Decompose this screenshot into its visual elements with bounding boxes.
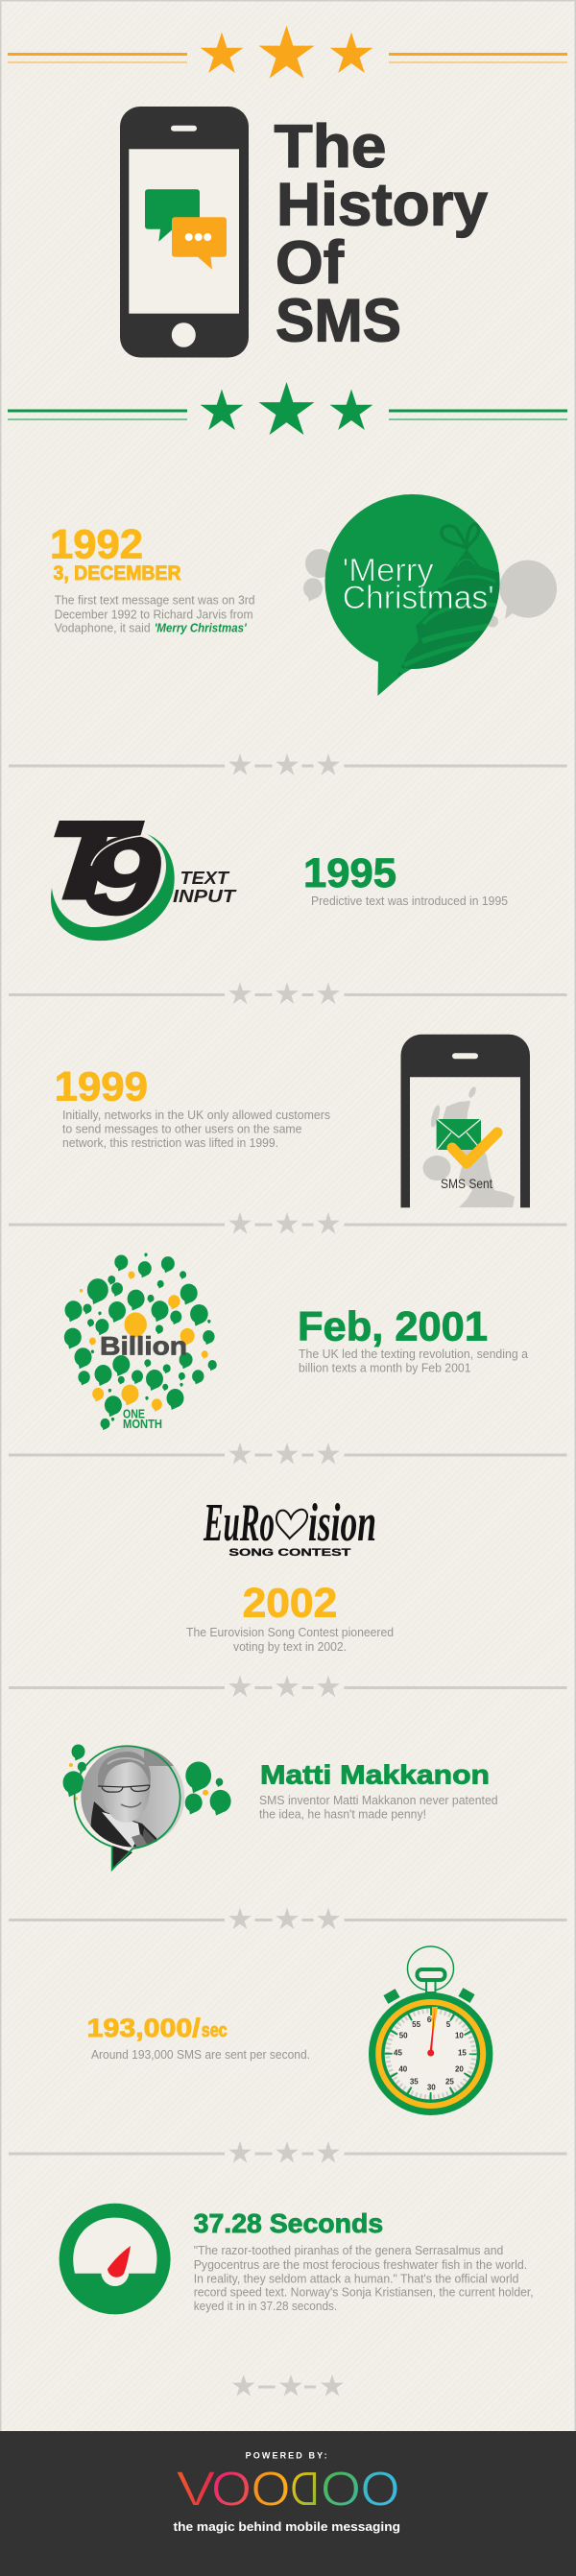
section Feb 2001: text [298, 1304, 529, 1374]
section Feb 2001: text: The UK led the texting revolution, sending a [299, 1347, 529, 1361]
shirt and tie [102, 1812, 140, 1848]
header: gold stars and lines [8, 25, 567, 79]
section 193,000 per second: text: 193,000/ [87, 2014, 201, 2042]
logo: Eurovision Song Contest [203, 1493, 376, 1559]
title: History [276, 171, 488, 238]
section 1999: text: to send messages to other users on the same [62, 1121, 301, 1136]
icon: orange chat bubble [172, 217, 227, 270]
dial numbers [394, 2015, 467, 2092]
bubble message: Christmas' [343, 580, 494, 616]
section 1999: text: 1999 [55, 1064, 148, 1110]
icon: green chat bubble [145, 189, 200, 242]
portrait: Matti Makkanon in speech bubble [63, 1742, 231, 1872]
section 1992: text [50, 522, 255, 635]
section 2002: text [186, 1580, 394, 1654]
section 37.28 seconds: text [194, 2208, 534, 2313]
title: Of [276, 229, 345, 297]
dial numbers: 5 [446, 2020, 451, 2029]
section 1995: text [303, 850, 508, 908]
closing stars [232, 2374, 344, 2397]
section 1992: text: The first text message sent was on 3rd [55, 593, 255, 607]
section 1999: text: network, this restriction was lifted in 1999. [62, 1135, 278, 1150]
logo: VOODOO: O [211, 2461, 252, 2516]
logo: T9 text input: 9 [84, 815, 160, 938]
caption: SMS Sent [441, 1176, 492, 1191]
dial numbers: 55 [412, 2020, 421, 2029]
logo: VOODOO: V [177, 2461, 215, 2516]
section 1992: text: 'Merry Christmas' [155, 621, 248, 635]
UK map [422, 1085, 515, 1207]
section 193,000 per second: text: sec [202, 2020, 228, 2041]
section 2002: text: 2002 [243, 1580, 337, 1626]
divider [9, 1676, 566, 1697]
section Matti Makkanon: text: SMS inventor Matti Makkanon never patented [259, 1793, 498, 1807]
christmas tree ornament [397, 524, 509, 676]
section Matti Makkanon: text: Matti Makkanon [260, 1759, 490, 1789]
section Matti Makkanon: text [259, 1759, 498, 1822]
section 1999: text [55, 1064, 330, 1150]
logo: T9 text input: T [48, 801, 130, 922]
title: SMS [276, 287, 401, 354]
logo: VOODOO: O [361, 2461, 399, 2516]
logo: Eurovision Song Contest: ision [308, 1493, 376, 1553]
section 2002: text: The Eurovision Song Contest pioneered [186, 1625, 394, 1639]
section 37.28 seconds: text: 37.28 Seconds [194, 2208, 383, 2238]
divider [9, 2141, 566, 2163]
tagline: the magic behind mobile messaging [173, 2519, 400, 2534]
green bubble [324, 494, 499, 669]
logo: VOODOO: D [290, 2461, 320, 2516]
section 1999: text: Initially, networks in the UK only allowed customers [62, 1108, 330, 1122]
label: Billion: Billion [100, 1332, 187, 1361]
section 37.28 seconds: text: "The razor-toothed piranhas of the genera Serrasalmus and [194, 2243, 503, 2257]
logo: T9 text input [48, 801, 237, 941]
loop and crown [407, 1946, 453, 1991]
section Feb 2001: text: Feb, 2001 [298, 1304, 488, 1350]
graphic: billion texts bubble cloud [64, 1252, 217, 1431]
title [275, 113, 488, 354]
powered by label: POWERED BY: [246, 2451, 327, 2461]
bubble message: 'Merry [343, 552, 434, 588]
green swoosh [51, 834, 175, 941]
icon: speedometer gauge [60, 2204, 171, 2314]
jacket [91, 1801, 158, 1872]
dial numbers: 50 [399, 2031, 408, 2039]
section 37.28 seconds: text: Pygocentrus are the most ferocious freshwater fish in the world. [194, 2257, 527, 2272]
footer panel [0, 2431, 576, 2576]
section Feb 2001: text: billion texts a month by Feb 2001 [299, 1361, 470, 1374]
dial numbers: 25 [445, 2077, 454, 2086]
header: green stars and lines [8, 382, 567, 435]
dial numbers: 45 [394, 2049, 402, 2058]
section 37.28 seconds: text: record speed text. Norway's Sonja Kristiansen, the current holder, [194, 2285, 534, 2300]
section Matti Makkanon: text: the idea, he hasn't made penny! [259, 1806, 426, 1822]
title: The [275, 113, 386, 180]
divider [9, 983, 566, 1004]
section 193,000 per second: text: Around 193,000 SMS are sent per second. [91, 2047, 310, 2062]
dial ticks [388, 2011, 474, 2097]
dial numbers: 30 [427, 2083, 436, 2092]
icon: stopwatch [369, 1946, 492, 2115]
side bubbles [63, 1744, 231, 1816]
section 1992: text: 1992 [50, 522, 143, 568]
section 1995: text: 1995 [303, 850, 396, 896]
section 2002: text: voting by text in 2002. [233, 1639, 347, 1654]
section 1992: text: Vodaphone, it said [55, 621, 151, 635]
logo: T9 text input: TEXT [180, 869, 230, 888]
check mark [452, 1133, 497, 1163]
ornament bow [442, 524, 478, 548]
white separator arc [91, 836, 141, 866]
divider [9, 1908, 566, 1929]
logo: T9 text input: INPUT [173, 887, 237, 906]
divider [9, 1443, 566, 1465]
body [369, 1992, 492, 2115]
head [104, 1762, 150, 1823]
icon: phone with UK map and SMS sent [400, 1035, 530, 1207]
dial numbers: 20 [455, 2064, 464, 2073]
heart [276, 1510, 307, 1538]
divider [9, 753, 566, 775]
label: One Month [123, 1406, 162, 1431]
logo: VOODOO: O [321, 2461, 361, 2516]
icon: phone with chat bubbles [120, 107, 249, 357]
photo [81, 1747, 184, 1868]
divider [9, 1212, 566, 1234]
section 37.28 seconds: text: keyed it in in 37.28 seconds. [194, 2299, 337, 2313]
dial numbers: 10 [455, 2031, 464, 2039]
speech bubble: Merry Christmas [303, 494, 557, 696]
T bar and stem [54, 821, 145, 900]
envelope [437, 1119, 481, 1150]
dial numbers: 40 [398, 2064, 408, 2073]
dial numbers: 15 [458, 2049, 467, 2058]
bubble outline [75, 1746, 180, 1870]
grey background bubbles [303, 549, 557, 628]
section 1992: text: December 1992 to Richard Jarvis from [55, 607, 253, 622]
section 193,000 per second: text [87, 2014, 310, 2062]
logo: VOODOO: O [252, 2461, 290, 2516]
side buttons [383, 1989, 400, 2004]
logo: Eurovision Song Contest: SONG CONTEST [228, 1547, 351, 1559]
section 1992: text: 3, DECEMBER [54, 562, 180, 584]
logo: Eurovision Song Contest: EuRo [203, 1493, 275, 1553]
bubble message [343, 552, 494, 616]
logo: VOODOO [177, 2461, 399, 2516]
hands [432, 2007, 438, 2044]
label: One Month: ONE [123, 1406, 145, 1420]
dial numbers: 35 [410, 2077, 419, 2086]
label: One Month: MONTH [123, 1417, 162, 1431]
section 1995: text: Predictive text was introduced in 1995 [311, 894, 508, 908]
section 37.28 seconds: text: In reality, they seldom attack a human." That's the official world [194, 2272, 518, 2286]
dial numbers: 60 [427, 2015, 436, 2024]
